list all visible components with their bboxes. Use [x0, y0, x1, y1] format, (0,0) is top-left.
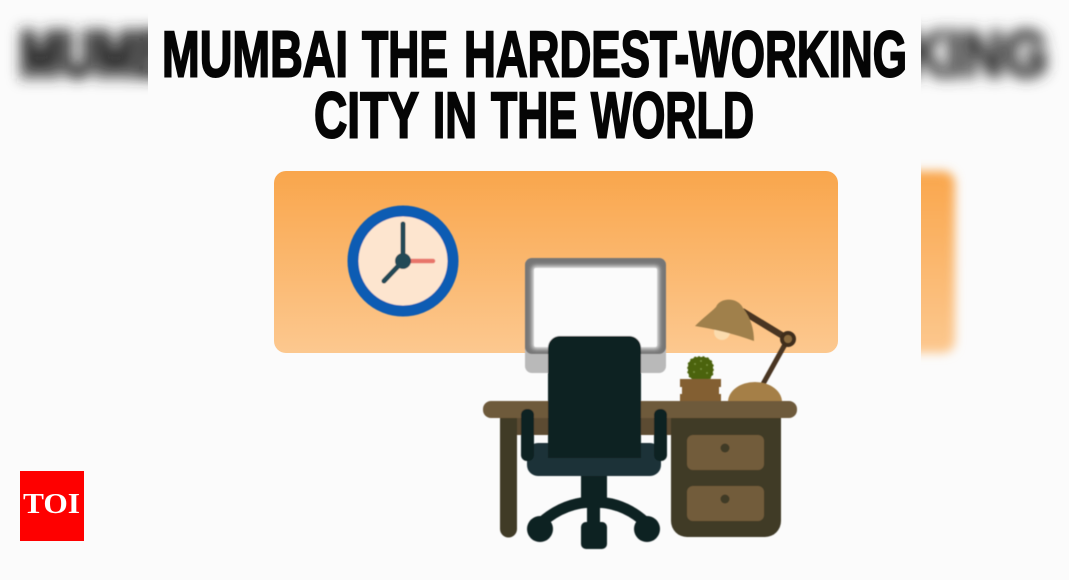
- chair back: [548, 336, 641, 458]
- lamp: [695, 300, 794, 402]
- orange wall panel: [274, 171, 838, 353]
- drawer bottom: [687, 486, 764, 521]
- icon: desk, monitor, chair and lamp: [483, 258, 797, 549]
- drawer knob bottom: [720, 494, 730, 504]
- drawer top: [687, 435, 764, 470]
- cactus plant: [688, 357, 713, 381]
- desk top: [483, 401, 797, 418]
- blurred title backdrop left: MUMB: [20, 18, 170, 90]
- title: MUMBAI: [162, 18, 348, 90]
- plant pot: [680, 379, 721, 402]
- title: [162, 18, 907, 151]
- chair base: [527, 476, 660, 549]
- logo: TOI: [20, 471, 84, 541]
- icon: wall clock: [353, 211, 453, 311]
- desk cabinet: [671, 416, 781, 537]
- drawer knob top: [720, 444, 730, 452]
- title: IN: [433, 78, 477, 151]
- blurred orange panel backdrop right: [921, 163, 963, 360]
- chair right armrest: [654, 409, 667, 461]
- title: CITY: [314, 78, 419, 151]
- chair seat: [527, 443, 661, 476]
- desk left leg: [500, 416, 517, 538]
- title: THE: [491, 78, 577, 151]
- chair left armrest: [521, 409, 534, 461]
- logo: TOI: TOI: [23, 488, 80, 520]
- title: WORLD: [591, 78, 754, 151]
- desk underside strip: [500, 416, 672, 435]
- title: THE: [362, 18, 448, 90]
- blurred title backdrop right: KING: [905, 18, 1048, 90]
- monitor: [525, 258, 666, 373]
